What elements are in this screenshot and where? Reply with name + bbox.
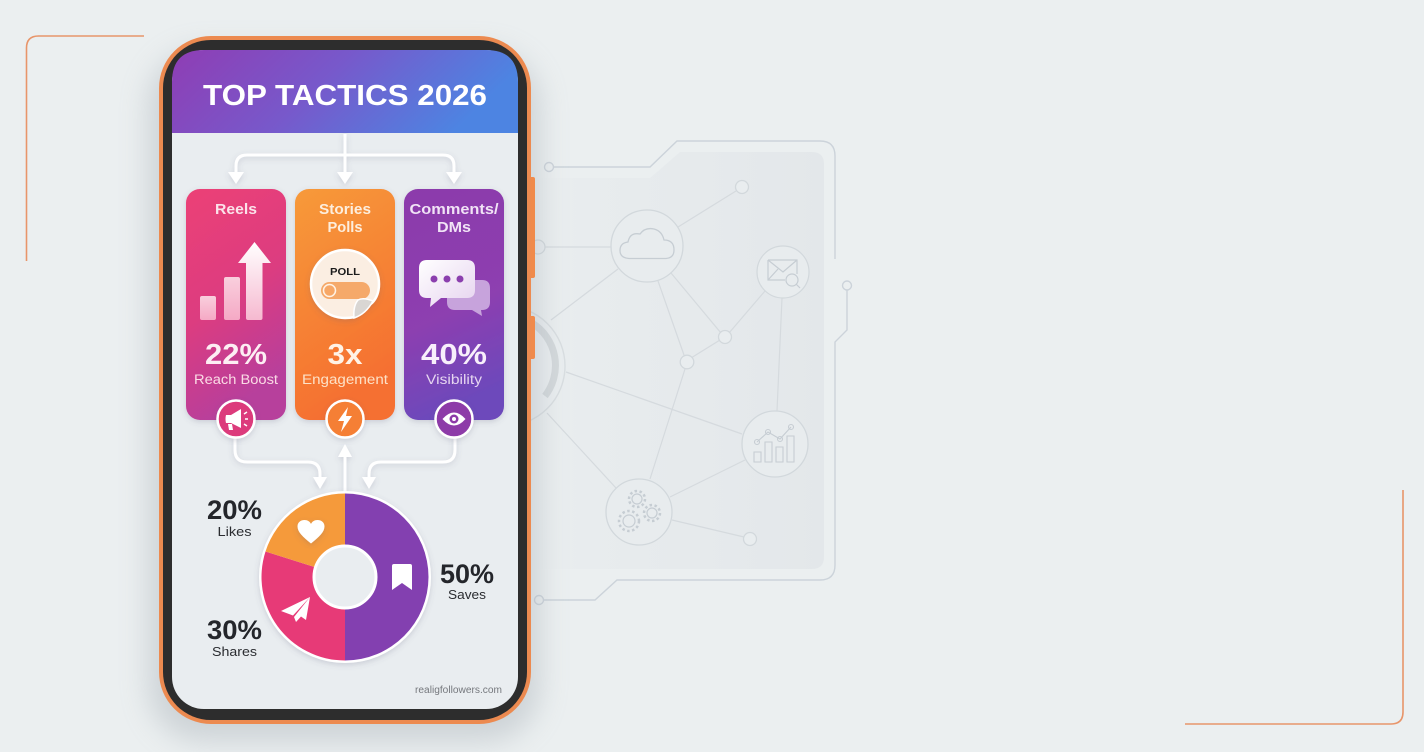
circuit outline (534, 141, 852, 604)
stat: Likes 20%: Likes (218, 524, 252, 539)
panel: Reels (186, 189, 286, 420)
stat: Saves 50%: 50% (440, 559, 494, 589)
donut chart (259, 491, 431, 663)
icon: heart (298, 520, 324, 544)
panel: Stories Polls (295, 189, 395, 420)
heading: Stories Polls: Polls (328, 220, 362, 236)
heading: Stories Polls: Stories (319, 202, 371, 218)
slice: likes 20% (266, 494, 345, 567)
title: TOP TACTICS 2026 (203, 80, 487, 112)
phone frame (159, 36, 531, 724)
network links (545, 191, 782, 537)
phone side buttons (529, 177, 535, 359)
stat: Likes 20%: 20% (207, 495, 262, 525)
icon: poll sticker (311, 250, 379, 318)
icon: paper plane (281, 597, 310, 622)
sticker curl (354, 299, 373, 318)
stat: Shares 30% (207, 615, 262, 659)
network diagram background (445, 141, 852, 604)
arrows: cards to donut (235, 436, 455, 492)
header band (172, 50, 518, 133)
stat: Likes 20% (207, 495, 262, 539)
icon: growth bars with arrow (200, 242, 271, 320)
heading: Reels: Reels (215, 202, 257, 218)
icon: cloud node (611, 210, 683, 282)
icon: chart node (742, 411, 808, 477)
phone (159, 36, 531, 724)
network panel (530, 152, 824, 569)
corner bracket: top left (26, 36, 144, 261)
icon: poll sticker: POLL (330, 266, 361, 278)
panel: Comments/DMs (404, 189, 504, 420)
label: Visibility: Visibility (426, 372, 482, 387)
heading: Comments/DMs: DMs (437, 220, 471, 236)
label: Reach Boost: Reach Boost (194, 372, 278, 387)
stat: Saves 50% (440, 559, 494, 602)
slice: shares 30% (262, 552, 345, 660)
icon: mail search node (757, 246, 809, 298)
stat: Shares 30%: Shares (212, 644, 258, 659)
donut hole (314, 546, 376, 608)
hub gauge (445, 306, 565, 426)
phone shadow (148, 50, 540, 742)
label: Engagement: Engagement (302, 372, 388, 387)
stat: 3x: 3x (328, 339, 362, 371)
icon: chat bubbles (419, 260, 490, 316)
network nodes (531, 180, 756, 546)
corner bracket: bottom right (1185, 490, 1403, 724)
icon: lightning badge (326, 400, 364, 438)
icon: gears node (606, 479, 672, 545)
icon: eye badge (436, 400, 472, 438)
icon: bookmark (392, 564, 412, 590)
stat: Shares 30%: 30% (207, 615, 262, 645)
stat: Saves 50%: Saves (448, 587, 487, 602)
phone screen (172, 50, 518, 709)
heading: Comments/DMs: Comments/ (410, 202, 498, 218)
source credit: realigfollowers.com (415, 685, 502, 696)
arrows: header to cards (228, 134, 462, 184)
stat: 22%: 22% (205, 339, 267, 371)
stat: 40%: 40% (421, 339, 487, 371)
icon: megaphone badge (218, 400, 254, 438)
slice: saves 50% (345, 494, 429, 660)
phone bezel (163, 40, 527, 720)
